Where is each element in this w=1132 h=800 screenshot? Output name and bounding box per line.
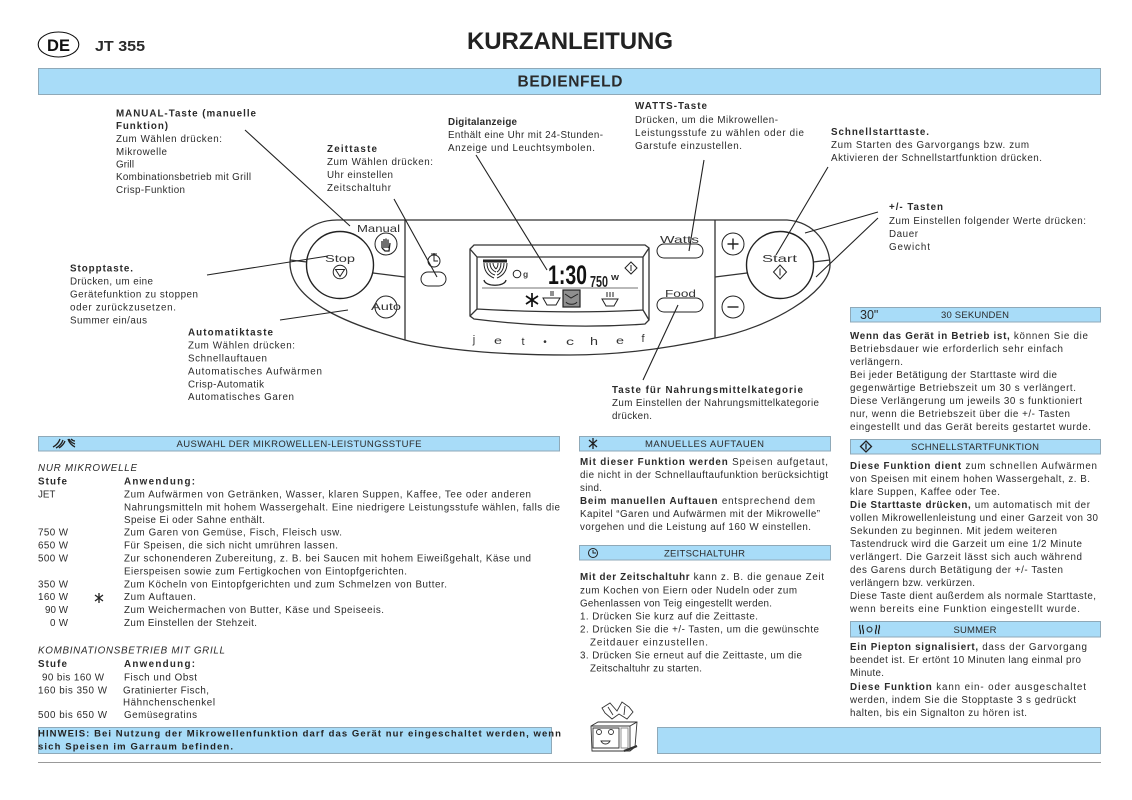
stop button: Stop — [325, 253, 355, 265]
section bar: 30 seconds: 30" — [860, 308, 878, 322]
icon: clock and g: g — [523, 269, 528, 279]
callout: watts key: Drücken, um die Mikrowellen- — [635, 115, 778, 126]
text block: buzzer: halten, bis ein Signalton zu hören ist. — [850, 708, 1027, 719]
text block: 30 seconds: verlängern. — [850, 357, 903, 368]
text block: quick start: vollen Mikrowellenleistung und einer Garzeit von 30 — [850, 513, 1099, 524]
text block: 30 seconds: Bei jeder Betätigung der Starttaste wird die — [850, 370, 1058, 381]
heading band: Bedienfeld: BEDIENFELD — [518, 74, 622, 90]
table: microwave only: JET — [38, 490, 55, 500]
section bar: manual defrost — [580, 436, 830, 451]
subheading: microwave only: NUR MIKROWELLE — [38, 463, 137, 474]
brand lettering: • — [543, 337, 547, 348]
table: combination with grill: Gemüsegratins — [124, 710, 197, 721]
text block: timer: Mit der Zeitschaltuhr kann z. B. die genaue Zeit — [580, 572, 824, 583]
callout: auto key: Schnellauftauen — [188, 354, 267, 364]
callout: manual key: Funktion) — [116, 121, 168, 132]
callout: stop key: Drücken, um eine — [70, 276, 154, 288]
brand lettering: c — [566, 337, 574, 348]
timer button — [421, 253, 446, 286]
brand lettering: h — [590, 336, 598, 348]
callout: food key — [612, 385, 820, 422]
callout: food key: drücken. — [612, 411, 652, 422]
manual button — [357, 223, 400, 255]
section bar: 30 seconds — [850, 308, 1100, 322]
minus button — [722, 296, 744, 318]
text block: quick start: des Garens durch Betätigung der +/- Tasten — [850, 565, 1063, 576]
heading band: Bedienfeld — [38, 68, 1100, 94]
text block: timer: 3. Drücken Sie erneut auf die Zeittaste, um die — [580, 650, 803, 662]
open book — [602, 702, 633, 719]
table: microwave only — [38, 476, 561, 629]
stop button — [306, 232, 374, 298]
table: combination with grill — [38, 659, 215, 721]
power readout: 750 — [590, 274, 608, 291]
section bar: power levels — [38, 436, 560, 451]
callout: manual key — [116, 108, 257, 196]
table: microwave only: Speise Ei oder Sahne enthält. — [124, 515, 265, 526]
table: microwave only: Zum Köcheln von Eintopfgerichten und zum Schmelzen von Butter. — [124, 580, 447, 590]
table: microwave only: Zur schonenderen Zubereitung, z. B. bei Saucen mit hohem Eiweißgehalt, Käse und — [124, 554, 531, 564]
text block: buzzer: beendet ist. Er ertönt 10 Minuten lang einmal pro — [850, 655, 1082, 666]
section bar: timer — [580, 546, 830, 560]
text block: timer: 1. Drücken Sie kurz auf die Zeittaste. — [580, 612, 758, 622]
watts button — [657, 234, 703, 258]
language badge — [38, 32, 79, 57]
table: microwave only: Anwendung: — [124, 476, 195, 488]
callout: stop key: Stopptaste. — [70, 264, 133, 274]
table: combination with grill: 160 bis 350 W — [38, 686, 108, 696]
callout: stop key: Summer ein/aus — [70, 316, 147, 326]
table: microwave only: Zum Einstellen der Stehzeit. — [124, 618, 257, 629]
callout: timer key: Zeitschaltuhr — [327, 183, 392, 194]
callout: food key: Zum Einstellen der Nahrungsmittelkategorie — [612, 398, 820, 409]
panel outline — [290, 220, 830, 355]
table: microwave only: Eierspeisen sowie zum Fertigkochen von Eintopfgerichten. — [124, 566, 407, 578]
subheading: combination with grill: KOMBINATIONSBETRIEB MIT GRILL — [38, 646, 225, 656]
text block: timer: zum Kochen von Eiern oder Nudeln oder zum — [580, 586, 797, 596]
food button: Food — [665, 288, 696, 300]
section: quick start — [849, 440, 1100, 615]
icon: steam bowl — [602, 292, 618, 306]
callout: timer key: Zeittaste — [327, 144, 378, 155]
callout: auto key: Zum Wählen drücken: — [188, 340, 295, 352]
icon: defrost small — [95, 593, 103, 603]
callout: manual key: Kombinationsbetrieb mit Grill — [116, 172, 251, 183]
icon: start diamond — [625, 262, 637, 274]
text block: buzzer: Diese Funktion kann ein- oder ausgeschaltet — [850, 682, 1086, 693]
text block: buzzer: werden, indem Sie die Stopptaste 3 s gedrückt — [849, 695, 1076, 706]
text block: quick start: Tastendruck wird die Garzeit um eine 1/2 Minute — [850, 539, 1083, 550]
callout: stop key: oder zurückzusetzen. — [70, 302, 176, 314]
icon: bowl — [543, 291, 560, 305]
table: microwave only: 160 W — [38, 592, 69, 603]
callout: plus minus keys: +/- Tasten — [889, 202, 943, 213]
text block: manual defrost: Beim manuellen Auftauen entsprechend dem — [580, 496, 815, 507]
callout: auto key: Automatisches Aufwärmen — [188, 366, 322, 378]
callout: manual key: Zum Wählen drücken: — [116, 134, 222, 145]
microwave face — [596, 730, 614, 744]
text block: timer: Gehenlassen von Teig eingestellt werden. — [580, 598, 772, 610]
text block: manual defrost: die nicht in der Schnellauftaufunktion berücksichtigt — [580, 470, 828, 481]
callout: display: Digitalanzeige — [448, 117, 518, 128]
callout: display: Anzeige und Leuchtsymbolen. — [448, 143, 595, 154]
table: microwave only: Zum Aufwärmen von Getränken, Wasser, klaren Suppen, Kaffee, Tee oder anderen — [124, 490, 531, 500]
section bar: power levels: AUSWAHL DER MIKROWELLEN-LEISTUNGSSTUFE — [176, 439, 422, 450]
section: microwave power levels — [38, 436, 561, 721]
callout: plus minus keys: Gewicht — [889, 242, 930, 253]
table: microwave only: 90 W — [45, 605, 69, 616]
text block: quick start — [849, 461, 1099, 615]
table: microwave only: Für Speisen, die sich nicht umrühren lassen. — [124, 540, 338, 552]
text block: 30 seconds — [850, 331, 1091, 433]
callout: watts key: WATTS-Taste — [635, 101, 708, 112]
table: microwave only: Stufe — [38, 476, 68, 488]
text block: quick start: Diese Taste dient außerdem als normale Starttaste, — [850, 591, 1096, 602]
table: microwave only: Zum Garen von Gemüse, Fisch, Fleisch usw. — [124, 528, 342, 538]
text block: timer: Zeitschaltuhr zu starten. — [590, 664, 702, 674]
microwave body — [591, 722, 637, 751]
language badge: DE — [47, 37, 70, 55]
callout: display — [448, 117, 603, 154]
callout: manual key: Grill — [116, 160, 134, 170]
callout: quick start key: Aktivieren der Schnellstartfunktion drücken. — [831, 153, 1042, 164]
callout: stop key — [70, 264, 198, 326]
power readout: W — [611, 275, 619, 282]
callout: auto key: Crisp-Automatik — [188, 380, 264, 390]
section bar: quick start — [850, 440, 1100, 454]
callout: watts key — [635, 101, 805, 152]
callout: plus minus keys: Zum Einstellen folgender Werte drücken: — [889, 216, 1086, 227]
brand lettering: t — [521, 336, 525, 348]
leader lines — [207, 130, 878, 380]
section: 30 seconds — [850, 308, 1100, 433]
text block: quick start: Die Starttaste drücken, um automatisch mit der — [850, 500, 1091, 511]
table: combination with grill: Fisch und Obst — [124, 672, 197, 684]
icon: defrost — [526, 293, 538, 307]
callout: manual key: MANUAL-Taste (manuelle — [116, 108, 257, 120]
table: combination with grill: 500 bis 650 W — [38, 710, 108, 721]
brand lettering: f — [641, 333, 645, 345]
callout: auto key: Automatiktaste — [188, 328, 274, 338]
text block: manual defrost: Mit dieser Funktion werden Speisen aufgetaut, — [580, 457, 828, 468]
text block: buzzer: Minute. — [850, 668, 884, 679]
note bar: HINWEIS: Bei Nutzung der Mikrowellenfunktion darf das Gerät nur eingeschaltet werden, wenn — [38, 728, 561, 740]
manual button: Manual — [357, 223, 400, 235]
display — [470, 245, 649, 326]
table: microwave only: 0 W — [50, 618, 69, 629]
callout: quick start key: Zum Starten des Garvorgangs bzw. zum — [831, 140, 1029, 151]
callout: manual key: Crisp-Funktion — [116, 185, 185, 196]
section bar: quick start: SCHNELLSTARTFUNKTION — [911, 442, 1039, 453]
start button — [746, 232, 814, 298]
callout: watts key: Leistungsstufe zu wählen oder die — [635, 128, 805, 139]
table: microwave only: Nahrungsmitteln mit hohem Wassergehalt. Eine niedrigere Leistungsstufe wählen, falls die — [124, 502, 561, 514]
text block: 30 seconds: Diese Verlängerung um jeweils 30 s funktioniert — [850, 396, 1082, 407]
callout: plus minus keys — [889, 202, 1086, 253]
panel dividers — [290, 220, 830, 340]
control panel diagram — [290, 220, 830, 355]
text block: 30 seconds: gegenwärtige Betriebszeit um 30 s verlängert. — [850, 383, 1076, 394]
icon: oven — [563, 290, 580, 307]
text block: quick start: Diese Funktion dient zum schnellen Aufwärmen — [850, 461, 1097, 472]
watts button: Watts — [660, 234, 699, 246]
section bar: buzzer: SUMMER — [954, 625, 997, 636]
time readout: 1:30 — [548, 260, 587, 290]
text block: quick start: Sekunden zu beginnen. Mit jedem weiteren — [850, 526, 1057, 537]
text block: 30 seconds: eingestellt und das Gerät bereits gestartet wurde. — [850, 422, 1091, 433]
table: combination with grill: Hähnchenschenkel — [123, 698, 215, 708]
note bar: sich Speisen im Garraum befinden. — [38, 742, 233, 752]
plus button — [722, 233, 744, 255]
callout: stop key: Gerätefunktion zu stoppen — [70, 290, 198, 300]
callout: quick start key: Schnellstarttaste. — [831, 127, 929, 138]
table: microwave only: Zum Auftauen. — [124, 592, 196, 603]
callout: timer key — [327, 144, 433, 194]
brand lettering: j — [472, 334, 475, 346]
section: buzzer — [849, 622, 1100, 719]
callout: quick start key — [831, 127, 1042, 164]
brand lettering: e — [494, 336, 503, 347]
text block: quick start: von Speisen mit einem hohen Wassergehalt, z. B. — [850, 474, 1090, 485]
text block: quick start: verlängern bzw. verkürzen. — [850, 578, 975, 589]
table: combination with grill: Anwendung: — [124, 659, 195, 670]
text block: 30 seconds: nur, wenn die Betriebszeit über die +/- Tasten — [850, 409, 1070, 420]
table: combination with grill: Stufe — [38, 659, 68, 670]
section bar: timer: ZEITSCHALTUHR — [664, 548, 745, 560]
icon: clock and g — [513, 269, 528, 279]
table: microwave only: 500 W — [38, 554, 69, 564]
table: combination with grill: 90 bis 160 W — [42, 672, 105, 684]
callout: timer key: Uhr einstellen — [327, 170, 393, 181]
section bar: buzzer — [850, 622, 1100, 637]
table: microwave only: Zum Weichermachen von Butter, Käse und Speiseeis. — [124, 605, 384, 616]
callout: watts key: Garstufe einzustellen. — [635, 141, 742, 152]
table: microwave only: 750 W — [38, 528, 69, 538]
section: manual defrost — [580, 436, 830, 533]
footer rule — [38, 762, 1101, 764]
callout: display: Enthält eine Uhr mit 24-Stunden- — [448, 130, 603, 141]
callout: timer key: Zum Wählen drücken: — [327, 157, 433, 168]
text block: quick start: wenn bereits eine Funktion eingestellt wurde. — [849, 604, 1080, 615]
brand lettering — [472, 333, 645, 348]
callout: auto key — [188, 328, 322, 403]
text block: quick start: klare Suppen, Kaffee oder Tee. — [850, 487, 1000, 498]
section bar: manual defrost: MANUELLES AUFTAUEN — [645, 439, 764, 450]
model name: JT 355 — [95, 38, 145, 55]
section: timer — [580, 546, 830, 674]
auto button: Auto — [371, 301, 401, 313]
text block: timer — [580, 572, 824, 674]
illustration: microwave with book — [591, 702, 637, 751]
start button: Start — [762, 253, 797, 265]
brand lettering: e — [616, 336, 625, 347]
callout: auto key: Automatisches Garen — [188, 392, 294, 403]
auto button — [371, 296, 401, 318]
table: microwave only: 350 W — [38, 580, 69, 590]
text block: manual defrost — [580, 457, 828, 533]
callout: manual key: Mikrowelle — [116, 147, 168, 158]
icon: microwave waves — [483, 261, 507, 285]
text block: 30 seconds: Wenn das Gerät in Betrieb ist, können Sie die — [850, 331, 1089, 342]
text block: buzzer: Ein Piepton signalisiert, dass der Garvorgang — [850, 642, 1087, 653]
text block: manual defrost: vorgehen und die Leistung auf 160 W einstellen. — [580, 522, 811, 533]
section bar: 30 seconds: 30 SEKUNDEN — [941, 310, 1009, 321]
text block: timer: Zeitdauer einzustellen. — [590, 638, 708, 648]
table: microwave only: 650 W — [38, 540, 69, 552]
right empty bar — [658, 728, 1100, 754]
callout: food key: Taste für Nahrungsmittelkategorie — [612, 385, 804, 396]
text block: quick start: verlängert. Die Garzeit lässt sich auch während — [850, 552, 1082, 563]
title: KURZANLEITUNG — [467, 28, 673, 55]
text block: manual defrost: sind. — [580, 483, 602, 494]
food button — [657, 288, 703, 312]
note bar — [38, 728, 561, 754]
text block: 30 seconds: Betriebsdauer wie erforderlich sehr einfach — [850, 344, 1063, 355]
text block: buzzer — [849, 642, 1087, 719]
callout: plus minus keys: Dauer — [889, 229, 919, 240]
text block: timer: 2. Drücken Sie die +/- Tasten, um die gewünschte — [580, 624, 820, 636]
text block: manual defrost: Kapitel “Garen und Aufwärmen mit der Mikrowelle” — [580, 509, 820, 520]
table: combination with grill: Gratinierter Fisch, — [123, 686, 209, 696]
